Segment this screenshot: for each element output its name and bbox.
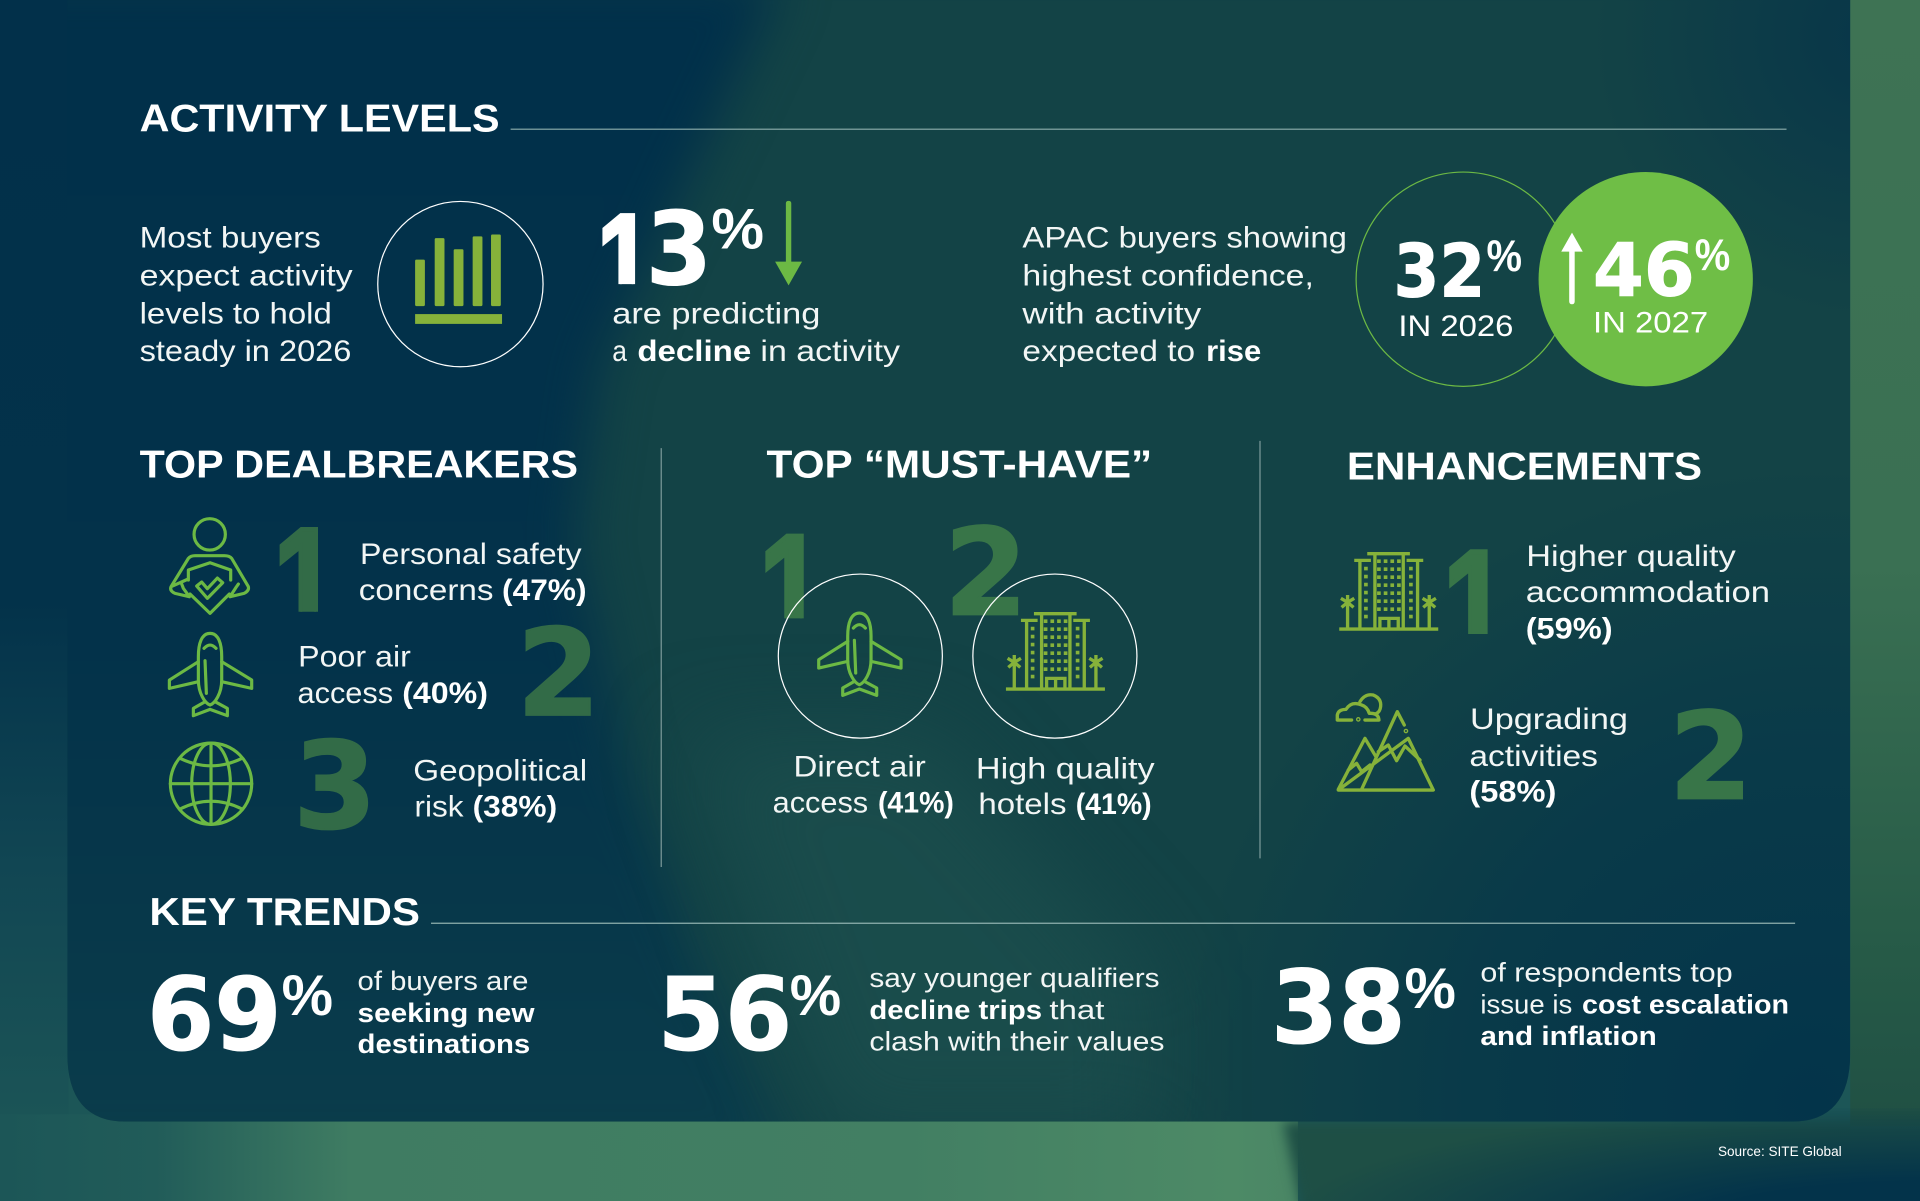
icon: person with shield (171, 519, 249, 613)
text: direct air access (773, 751, 954, 819)
stat: 13 percent decline: % (711, 198, 764, 262)
text: upgrading activities: (58%) (1469, 776, 1556, 809)
stat: 38 percent: of respondents top (1480, 958, 1733, 988)
stat: 13 percent decline: 1 (598, 189, 651, 328)
stat: 69 percent: of buyers are (358, 966, 528, 996)
icon: bar chart in circle (378, 201, 543, 367)
stat: 38 percent: issue is (1480, 989, 1572, 1019)
stat: 38 percent: % (1404, 957, 1456, 1021)
arrow: down (775, 201, 802, 285)
text: most buyers: expect activity (140, 259, 353, 292)
text: higher quality accommodation: (59%) (1526, 612, 1613, 645)
heading: activity levels: ACTIVITY LEVELS (140, 98, 500, 141)
text: upgrading activities (1469, 703, 1628, 809)
stat: 46 percent in 2027 (1539, 172, 1753, 386)
text: high quality hotels: (41%) (1076, 788, 1152, 821)
stat: 13 percent decline: decline (637, 335, 751, 368)
panel: activity levels (140, 98, 1787, 386)
panel: top dealbreakers (140, 444, 600, 857)
rank 2: 2 (944, 504, 1028, 643)
text: high quality hotels (976, 752, 1155, 821)
text: geopolitical risk: (38%) (473, 791, 557, 824)
text: personal safety: (47%) (502, 574, 587, 607)
icon: hotel in circle (973, 574, 1137, 738)
stat: 38 percent: and inflation (1480, 1021, 1657, 1051)
text: personal safety (359, 538, 587, 607)
heading: enhancements: ENHANCEMENTS (1347, 445, 1702, 488)
icon: globe (170, 743, 252, 824)
text: most buyers: Most buyers (140, 221, 321, 254)
stat: 38 percent (1271, 950, 1789, 1067)
text: upgrading activities: Upgrading (1470, 703, 1628, 736)
rank 1: 1 (274, 498, 337, 663)
icon: mountains and cloud (1337, 695, 1433, 790)
panel: top must-have (759, 444, 1155, 821)
stat: 56 percent (658, 956, 1164, 1073)
stat: 69 percent: destinations (358, 1029, 530, 1059)
stat: 13 percent decline: a (612, 335, 627, 368)
text: poor air access: Poor air (298, 641, 411, 674)
stat: 46 percent in 2027: IN 2027 (1593, 307, 1708, 340)
stat: 32 percent in 2026: IN 2026 (1398, 310, 1513, 343)
rank 3: 3 (293, 718, 377, 857)
text: APAC buyers: rise (1206, 335, 1261, 368)
text: direct air access: Direct air (793, 751, 926, 784)
stat: 38 percent: 38 (1271, 950, 1406, 1067)
stat: 56 percent: % (790, 964, 841, 1028)
source note: Source: SITE Global (1718, 1143, 1842, 1159)
stat: 69 percent: 69 (147, 956, 282, 1073)
text: higher quality accommodation (1526, 540, 1770, 645)
text: most buyers (140, 221, 353, 368)
stat: 56 percent: decline trips (869, 995, 1042, 1025)
text: poor air access: (40%) (402, 677, 488, 710)
text: direct air access: (41%) (878, 786, 954, 819)
text: APAC buyers: APAC buyers showing (1022, 221, 1347, 254)
rank 1: 1 (759, 505, 823, 670)
stat: 69 percent: % (282, 964, 333, 1028)
text: higher quality accommodation: accommodation (1526, 576, 1770, 609)
text: APAC buyers: with activity (1021, 297, 1201, 330)
text: APAC buyers: expected to (1022, 335, 1195, 368)
stat: 32 percent in 2026: % (1487, 232, 1522, 281)
stat: 32 percent in 2026 (1356, 172, 1570, 386)
text: APAC buyers (1021, 221, 1347, 368)
text: direct air access: access (773, 786, 868, 819)
text: geopolitical risk: risk (414, 791, 465, 824)
stat: 69 percent: seeking new (358, 998, 535, 1028)
stat: 69 percent (147, 956, 535, 1073)
text: poor air access (298, 641, 488, 710)
icon: airplane (169, 633, 252, 716)
heading: top must-have: TOP “MUST-HAVE” (767, 444, 1152, 487)
text: APAC buyers: highest confidence, (1022, 259, 1314, 292)
stat: 56 percent: 56 (658, 956, 792, 1073)
icon: airplane in circle (778, 574, 942, 738)
stat: 56 percent: clash with their values (869, 1027, 1164, 1057)
stat: 56 percent: that (1049, 995, 1105, 1025)
stat: 32 percent in 2026: 32 (1393, 230, 1485, 315)
text: most buyers: levels to hold (140, 297, 332, 330)
text: geopolitical risk (413, 755, 587, 824)
rank 2: 2 (517, 605, 600, 744)
heading: key trends: KEY TRENDS (149, 891, 420, 934)
text: poor air access: access (298, 677, 393, 710)
text: high quality hotels: High quality (976, 752, 1155, 785)
icon: hotel (1339, 554, 1438, 629)
panel: enhancements (1337, 445, 1770, 827)
stat: 46 percent in 2027: % (1695, 231, 1730, 280)
stat: 13 percent decline: are predicting (612, 297, 820, 330)
text: upgrading activities: activities (1469, 740, 1598, 773)
text: geopolitical risk: Geopolitical (413, 755, 587, 788)
stat: 46 percent in 2027: 46 (1593, 229, 1695, 314)
heading: top dealbreakers: TOP DEALBREAKERS (140, 444, 578, 487)
arrow: up (1561, 233, 1583, 304)
panel: key trends (147, 891, 1795, 1073)
stat: 38 percent: cost escalation (1582, 989, 1789, 1019)
rank 1: 1 (1443, 521, 1507, 686)
text: most buyers: steady in 2026 (140, 335, 351, 368)
stat: 13 percent decline (598, 189, 900, 368)
stat: 56 percent: say younger qualifiers (869, 963, 1160, 993)
rank 2: 2 (1669, 688, 1752, 827)
text: high quality hotels: hotels (978, 788, 1067, 821)
stat: 13 percent decline: 3 (646, 191, 712, 308)
text: higher quality accommodation: Higher quality (1526, 540, 1736, 573)
text: personal safety: Personal safety (360, 538, 582, 571)
stat: 13 percent decline: in activity (760, 335, 900, 368)
text: personal safety: concerns (359, 574, 493, 607)
